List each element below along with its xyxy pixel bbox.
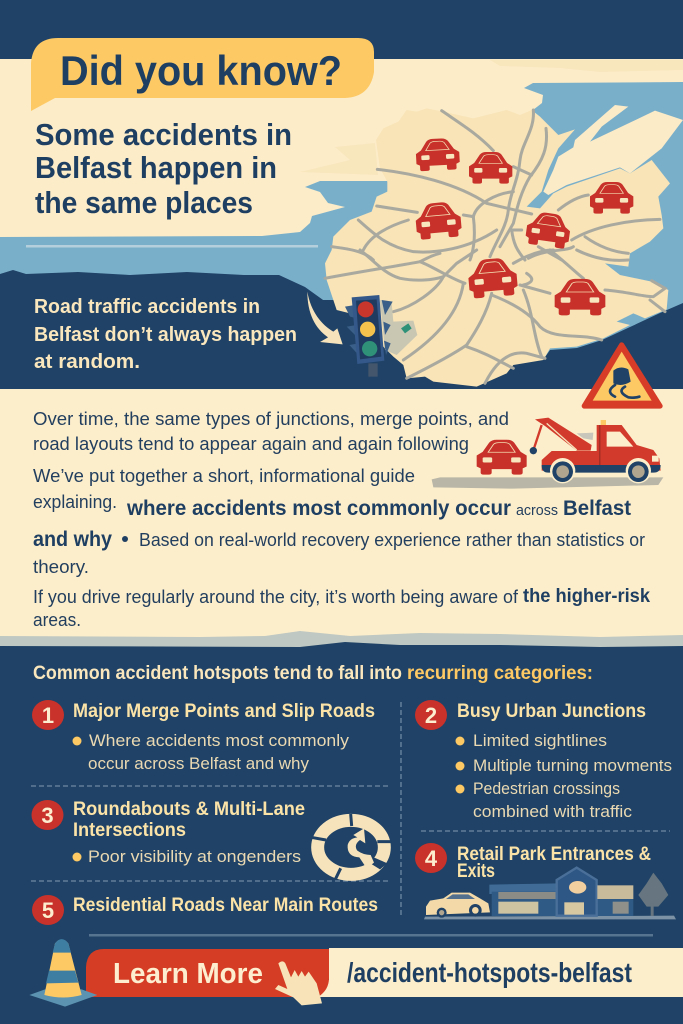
heading: recurring categories xyxy=(33,663,593,684)
dividers xyxy=(31,702,670,915)
paragraph two: We’ve put together a short, informational guide xyxy=(33,465,415,486)
panel: hotspot 3: Intersections xyxy=(73,820,186,841)
panel: hotspot 4: Exits xyxy=(457,861,495,882)
title: Busy Urban Junctions xyxy=(457,701,646,722)
bullet list: Multiple turning movments xyxy=(473,756,672,775)
bullet list: combined with traffic xyxy=(473,802,633,821)
button label: Learn More xyxy=(113,958,263,990)
heading: recurring categories: Common accident hotspots tend to fall into xyxy=(33,663,402,684)
title: Roundabouts & Multi-Lane xyxy=(73,799,305,820)
paragraph two xyxy=(33,465,645,577)
panel: hotspot 1: 1 xyxy=(42,703,54,728)
yellow speech banner xyxy=(31,38,374,111)
title: Residential Roads Near Main Routes xyxy=(73,895,378,916)
icon: traffic cone xyxy=(29,939,97,1007)
URL bar xyxy=(310,948,683,997)
icon: warning sign xyxy=(584,345,660,406)
tree xyxy=(638,873,668,907)
panel: hotspot 5: 5 xyxy=(42,898,54,923)
text block: road traffic accidents: Road traffic accidents in xyxy=(34,296,260,318)
heading: some accidents xyxy=(35,117,292,220)
paragraph three xyxy=(33,585,650,630)
road network xyxy=(325,110,665,383)
panel: hotspot 3: Poor visibility at ongenders xyxy=(88,847,301,866)
roadside sign blob xyxy=(380,300,417,355)
paragraph three: the higher-risk xyxy=(523,585,650,607)
headline: Did you know? xyxy=(60,47,342,94)
text block: road traffic accidents xyxy=(34,296,297,373)
beacon xyxy=(601,420,606,425)
red button xyxy=(86,949,329,997)
cream sky xyxy=(0,59,683,237)
red car markers xyxy=(414,138,633,315)
panel: hotspot 3 xyxy=(32,799,305,866)
truck boom xyxy=(535,418,592,451)
icon: pointer hand xyxy=(275,961,322,1005)
bullet list: Pedestrian crossings xyxy=(473,779,620,798)
bullet list: Limited sightlines xyxy=(473,731,607,750)
icon: traffic light xyxy=(345,295,417,377)
bullet list xyxy=(456,731,672,821)
text block: road traffic accidents: Belfast don’t always happen xyxy=(34,324,297,346)
paragraph two: Based on real-world recovery experience rather than statistics or xyxy=(139,529,645,550)
side wings xyxy=(345,300,393,357)
number badge xyxy=(32,800,64,830)
panel: hotspot 2 xyxy=(415,700,672,821)
paragraph two: where accidents most commonly occur xyxy=(126,497,511,520)
bullet xyxy=(72,852,82,862)
divider line xyxy=(89,934,653,936)
north-east peninsula xyxy=(543,105,683,195)
map land xyxy=(325,108,670,387)
heading: some accidents: Some accidents in xyxy=(35,117,292,152)
number badge xyxy=(32,895,64,925)
number badge xyxy=(415,700,447,730)
number badge xyxy=(32,700,64,730)
title: Major Merge Points and Slip Roads xyxy=(73,701,375,722)
panel: hotspot 1 xyxy=(32,700,375,773)
title: Retail Park Entrances & xyxy=(457,844,651,865)
number badge xyxy=(415,843,447,873)
paragraph two: and why xyxy=(33,528,112,551)
call to action: learn more xyxy=(86,948,683,1005)
icon: roundabout xyxy=(311,814,392,879)
housing xyxy=(352,295,384,364)
pole xyxy=(368,363,378,377)
cream car xyxy=(426,893,490,915)
illustration: tow truck and car xyxy=(432,418,663,489)
paragraph one: road layouts tend to appear again and again following xyxy=(33,433,469,454)
building xyxy=(489,883,558,894)
callout: Did you know xyxy=(31,38,374,111)
panel: hotspot 2: 2 xyxy=(425,703,437,728)
paragraph one xyxy=(33,408,509,454)
heading: recurring categories: recurring categories: xyxy=(407,663,593,684)
panel: hotspot 1: occur across Belfast and why xyxy=(88,754,309,773)
clouds xyxy=(300,60,683,175)
panel: hotspot 3: 3 xyxy=(41,803,54,828)
paragraph two: explaining. xyxy=(33,491,117,512)
east water xyxy=(520,82,683,360)
divider: torn paper edge xyxy=(0,631,683,660)
panel: hero map scene xyxy=(0,59,683,389)
panel: hotspot 1: Where accidents most commonly xyxy=(89,731,350,750)
panel: intro text xyxy=(0,389,683,641)
map of Belfast xyxy=(325,105,683,387)
west water xyxy=(0,181,395,300)
truck wheels xyxy=(550,458,575,483)
ground xyxy=(424,916,676,919)
road shadow xyxy=(432,477,663,489)
heading: some accidents: the same places xyxy=(35,185,253,220)
left horizon line xyxy=(26,245,318,248)
bullet xyxy=(72,736,82,746)
truck body xyxy=(542,425,661,471)
exhaust smoke xyxy=(577,433,593,440)
panel: hotspot 4 xyxy=(415,843,651,882)
paragraph three: areas. xyxy=(33,609,81,630)
navy hills xyxy=(0,270,683,389)
paragraph one: Over time, the same types of junctions, merge points, and xyxy=(33,408,509,429)
heading: some accidents: Belfast happen in xyxy=(35,150,277,185)
paragraph three: If you drive regularly around the city, it’s worth being aware of xyxy=(33,586,519,607)
paragraph two: across xyxy=(516,502,558,519)
towed car xyxy=(477,440,527,475)
cream background xyxy=(0,389,683,641)
paragraph two: Belfast xyxy=(563,497,631,520)
panel: hotspot 5 xyxy=(32,895,378,925)
text block: road traffic accidents: at random. xyxy=(34,351,140,373)
panel: hotspot 4: 4 xyxy=(425,846,438,871)
illustration: retail park xyxy=(424,868,676,919)
icon: curved arrow xyxy=(307,292,343,344)
lamps xyxy=(358,301,374,317)
paragraph two: theory. xyxy=(33,556,89,577)
